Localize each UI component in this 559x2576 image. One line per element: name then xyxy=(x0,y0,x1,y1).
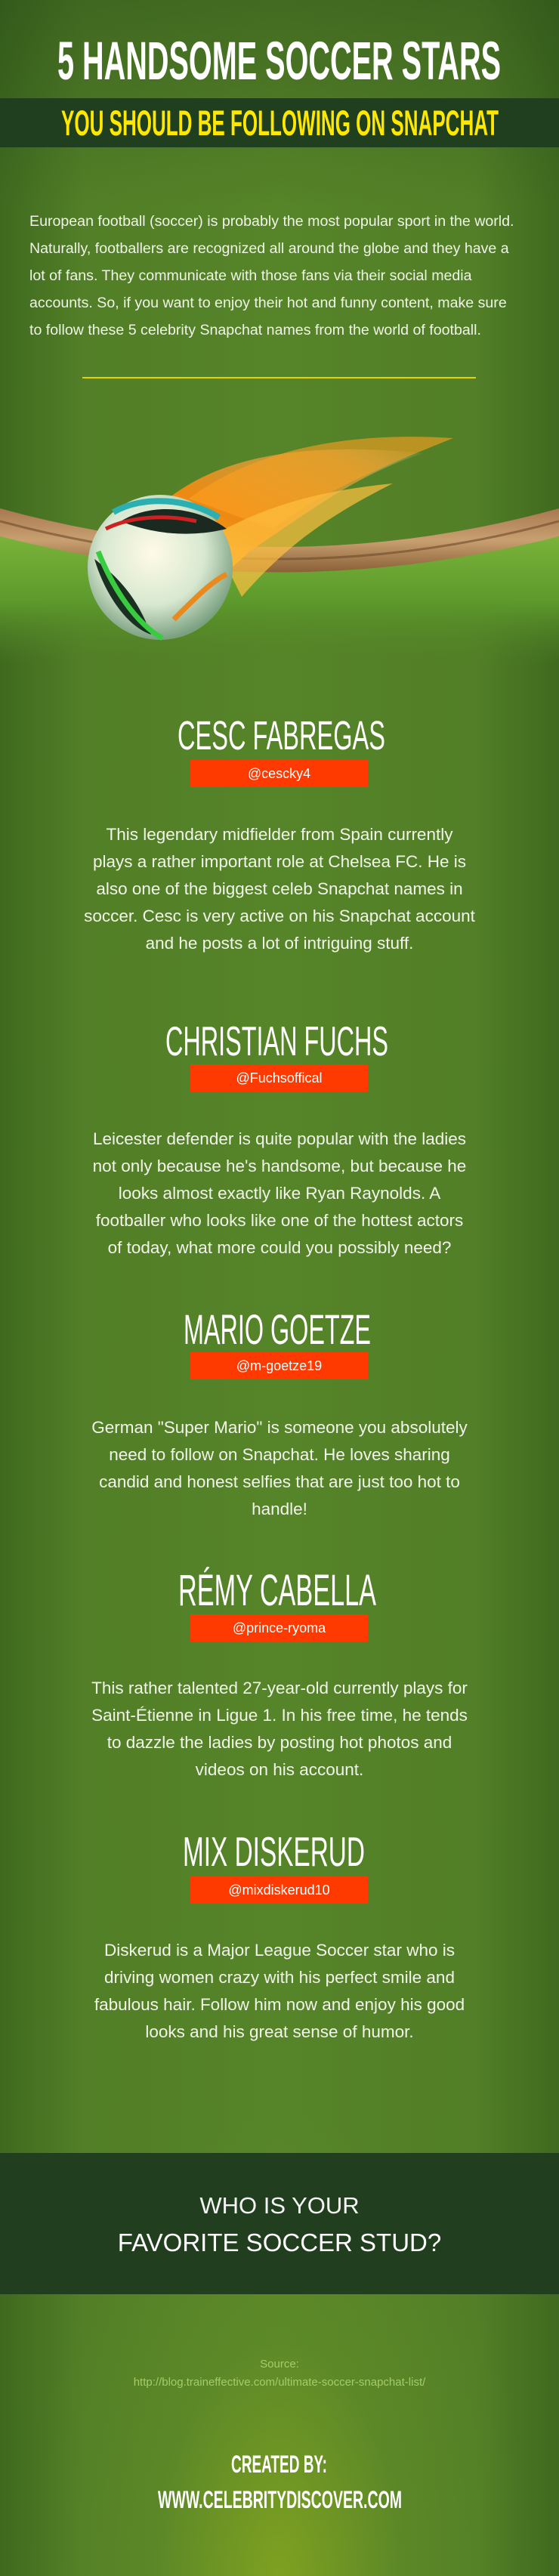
description: videos on his account. xyxy=(196,1760,363,1779)
player: Mario Goetze xyxy=(91,1305,468,1518)
description: Leicester defender is quite popular with the ladies xyxy=(93,1129,466,1148)
question band xyxy=(0,2153,559,2294)
handle xyxy=(190,1352,368,1379)
handle xyxy=(190,1064,368,1092)
grass xyxy=(0,536,559,665)
question line 2: FAVORITE SOCCER STUD? xyxy=(118,2229,441,2256)
description xyxy=(84,825,475,953)
question line 1: WHO IS YOUR xyxy=(199,2192,360,2219)
description: also one of the biggest celeb Snapchat names in xyxy=(96,879,463,898)
yellow divider xyxy=(82,377,476,378)
description: This legendary midfielder from Spain currently xyxy=(107,825,452,844)
handle: @prince-ryoma xyxy=(233,1620,326,1635)
description: need to follow on Snapchat. He loves sharing xyxy=(109,1445,450,1464)
description: handle! xyxy=(252,1500,307,1518)
description: fabulous hair. Follow him now and enjoy his good xyxy=(94,1995,465,2014)
intro text: to follow these 5 celebrity Snapchat names from the world of football. xyxy=(29,322,481,338)
description xyxy=(94,1941,465,2041)
intro text: European football (soccer) is probably the most popular sport in the world. xyxy=(29,213,514,230)
intro text: lot of fans. They communicate with those fans via their social media xyxy=(29,267,472,284)
description: of today, what more could you possibly need? xyxy=(108,1238,451,1257)
source xyxy=(134,2358,426,2389)
intro text: Naturally, footballers are recognized all around the globe and they have a xyxy=(29,240,509,257)
intro text: accounts. So, if you want to enjoy their hot and funny content, make sure xyxy=(29,295,507,311)
description: looks and his great sense of humor. xyxy=(145,2022,414,2041)
description: to dazzle the ladies by posting hot photos and xyxy=(107,1733,452,1752)
description: German "Super Mario" is someone you absolutely xyxy=(91,1418,468,1437)
description xyxy=(91,1418,468,1518)
player: Christian Fuchs xyxy=(93,1018,466,1257)
description xyxy=(91,1679,468,1779)
source: Source: xyxy=(260,2358,299,2371)
description: candid and honest selfies that are just too hot to xyxy=(99,1472,460,1491)
description: Saint-Étienne in Ligue 1. In his free time, he tends xyxy=(91,1706,468,1725)
player: Remy Cabella xyxy=(91,1566,468,1779)
player: Mix Diskerud xyxy=(94,1828,465,2041)
description: driving women crazy with his perfect smile and xyxy=(104,1968,455,1987)
handle: @Fuchsoffical xyxy=(236,1070,322,1086)
ball xyxy=(88,495,233,640)
description: not only because he's handsome, but because he xyxy=(93,1157,466,1175)
description: soccer. Cesc is very active on his Snapchat account xyxy=(84,907,475,925)
description xyxy=(93,1129,466,1257)
handle xyxy=(190,760,368,787)
stadium stands xyxy=(0,508,559,573)
handle xyxy=(190,1614,368,1642)
player: Cesc Fabregas xyxy=(84,713,475,953)
handle xyxy=(190,1876,368,1904)
description: and he posts a lot of intriguing stuff. xyxy=(146,934,413,953)
description: footballer who looks like one of the hottest actors xyxy=(96,1211,463,1230)
description: This rather talented 27-year-old currently plays for xyxy=(91,1679,468,1697)
credits: CREATED BY: xyxy=(231,2451,327,2478)
illustration: flaming ball over stadium xyxy=(0,437,559,647)
description: looks almost exactly like Ryan Raynolds. A xyxy=(119,1184,440,1203)
flames xyxy=(151,437,453,597)
credits xyxy=(158,2451,402,2512)
handle: @cescky4 xyxy=(248,766,310,781)
handle: @mixdiskerud10 xyxy=(228,1883,330,1898)
description: plays a rather important role at Chelsea FC. He is xyxy=(93,852,466,871)
intro text xyxy=(29,213,514,338)
description: Diskerud is a Major League Soccer star who is xyxy=(104,1941,455,1960)
handle: @m-goetze19 xyxy=(236,1358,322,1373)
source: http://blog.traineffective.com/ultimate-soccer-snapchat-list/ xyxy=(134,2376,425,2389)
